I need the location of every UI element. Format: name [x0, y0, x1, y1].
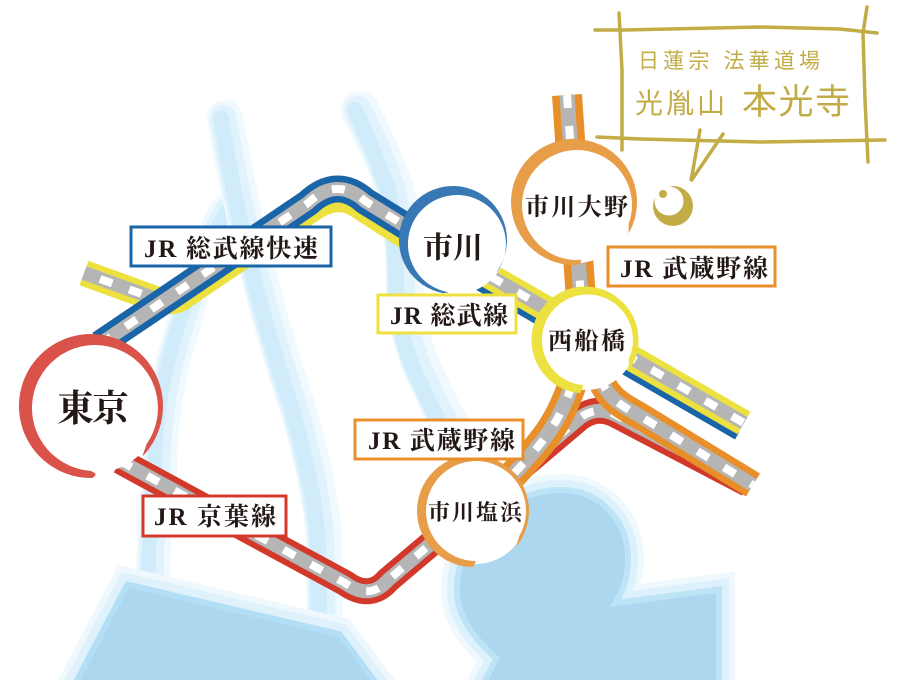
label: JR Sobu: JR 総武線 — [390, 302, 508, 330]
station: Ichikawa — [399, 186, 507, 294]
bay: right water — [460, 493, 716, 680]
label: JR Sobu — [378, 295, 516, 333]
label: JR Sobu rapid — [131, 227, 331, 266]
station: Nishi-Funabashi — [531, 287, 638, 393]
station: Ichikawa-Shiohama: 市川塩浜 — [428, 500, 523, 525]
sign text: mountain name: 光胤山 — [635, 88, 725, 119]
rail: JR Sobu lines, east of Ichikawa — [403, 230, 744, 436]
icon: crescent moon — [653, 186, 693, 226]
label: JR Musashino lower — [355, 420, 523, 459]
rail: JR Sobu rapid line, west of Ichikawa — [100, 189, 415, 344]
label: JR Sobu rapid: JR 総武線快速 — [144, 234, 319, 263]
sign text: temple name: 本光寺 — [742, 83, 850, 122]
rail: JR Musashino line north — [567, 95, 581, 300]
label: JR Keiyo: JR 京葉線 — [154, 503, 276, 531]
label: JR Musashino lower: JR 武蔵野線 — [368, 427, 515, 455]
station: Tokyo — [19, 334, 163, 478]
station: Tokyo: 東京 — [57, 388, 130, 430]
rail: JR Musashino line south-east — [600, 378, 753, 485]
river: centre — [221, 118, 325, 625]
station: Ichikawa-Ono — [511, 139, 637, 265]
rail: JR Sobu line, west of Ichikawa — [84, 199, 415, 304]
label: JR Keiyo — [143, 496, 286, 536]
station: Ichikawa: 市川 — [423, 232, 483, 265]
rail: JR Musashino line south — [510, 385, 572, 478]
station: Ichikawa-Shiohama — [417, 455, 529, 567]
river: left branch — [148, 212, 226, 600]
river: right — [355, 110, 483, 480]
sign text: sect and dojo: 日蓮宗 法華道場 — [638, 50, 820, 73]
bay: left water — [70, 588, 385, 680]
station: Nishi-Funabashi: 西船橋 — [548, 328, 625, 355]
rail: JR Keiyo line — [120, 411, 748, 591]
station: Ichikawa-Ono: 市川大野 — [525, 194, 628, 221]
sign: temple name frame — [595, 7, 885, 181]
label: JR Musashino upper — [608, 247, 775, 286]
label: JR Musashino upper: JR 武蔵野線 — [620, 255, 768, 283]
